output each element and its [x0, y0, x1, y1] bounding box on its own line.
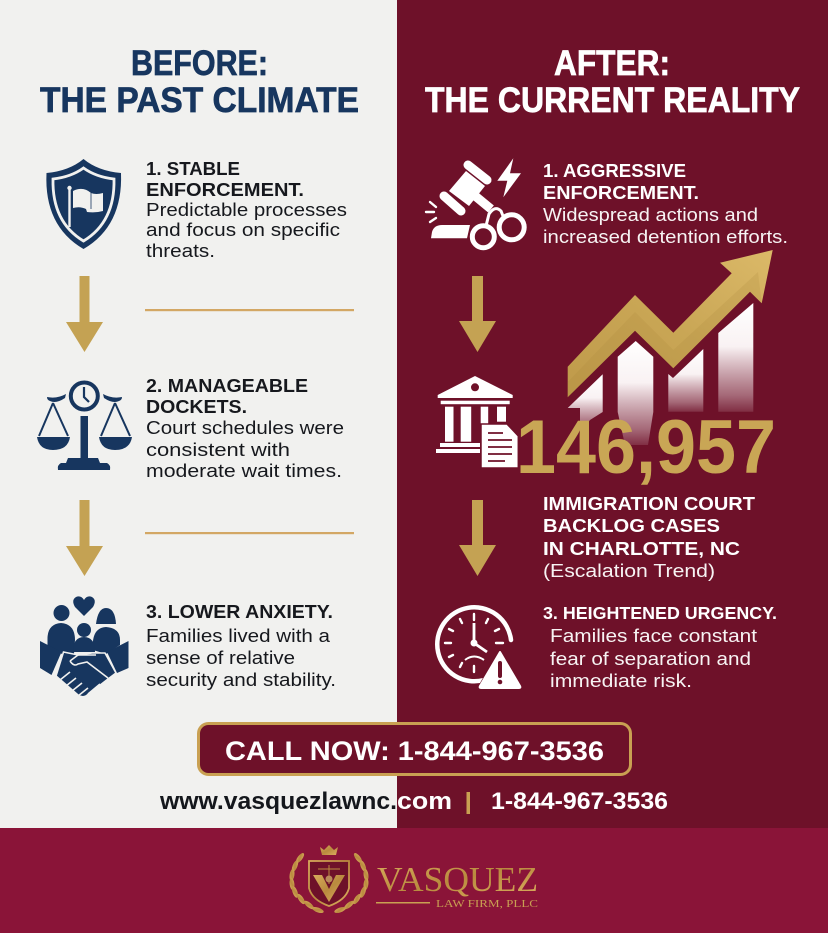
text block: stable enforcement: ENFORCEMENT.	[146, 179, 304, 200]
text block: lower anxiety: security and stability.	[146, 669, 336, 690]
chart: escalation bars and rising arrow	[568, 250, 773, 445]
text block: aggressive enforcement: 1. AGGRESSIVE	[543, 160, 686, 181]
text block: lower anxiety: 3. LOWER ANXIETY.	[146, 601, 333, 622]
text block: backlog cases	[543, 493, 756, 581]
icon: shield with flag	[46, 159, 121, 249]
text block: manageable dockets: moderate wait times.	[146, 460, 342, 481]
text block: lower anxiety: sense of relative	[146, 647, 295, 668]
text block: backlog cases: IN CHARLOTTE, NC	[543, 538, 740, 559]
icon: scales with clock	[37, 382, 132, 470]
panel: after	[397, 0, 828, 828]
contact line	[159, 788, 668, 815]
contact line: 1-844-967-3536	[491, 788, 668, 815]
call to action button: CALL NOW: 1-844-967-3536	[225, 736, 604, 766]
arrow: before step 2 to 3	[66, 500, 103, 576]
text block: stable enforcement: threats.	[146, 240, 215, 261]
text block: heightened urgency: 3. HEIGHTENED URGENCY.	[543, 603, 777, 623]
contact line: com	[397, 788, 452, 815]
arrow: after step 2 to 3	[459, 500, 496, 576]
text block: backlog cases: (Escalation Trend)	[543, 560, 715, 581]
logo wordmark: LAW FIRM, PLLC	[436, 899, 538, 910]
arrow: before step 1 to 2	[66, 276, 103, 352]
heading: after	[425, 44, 800, 120]
stat: backlog number: 146,957	[516, 405, 776, 490]
text block: heightened urgency: immediate risk.	[550, 670, 692, 691]
text block: heightened urgency: fear of separation and	[550, 648, 751, 669]
text block: stable enforcement: and focus on specific	[146, 219, 340, 240]
text block: stable enforcement: Predictable processes	[146, 199, 347, 220]
text block: lower anxiety: Families lived with a	[146, 625, 331, 646]
text block: manageable dockets: DOCKETS.	[146, 396, 247, 417]
text block: aggressive enforcement: ENFORCEMENT.	[543, 182, 699, 203]
logo wordmark: VASQUEZ	[377, 860, 538, 899]
text block: manageable dockets: consistent with	[146, 439, 290, 460]
heading: before	[40, 44, 359, 120]
text block: aggressive enforcement: increased detention efforts.	[543, 226, 788, 247]
call to action button	[198, 724, 630, 774]
heading: before: BEFORE:	[131, 44, 268, 83]
text block: stable enforcement: 1. STABLE	[146, 158, 240, 179]
icon: family and handshake	[40, 596, 128, 697]
text block: aggressive enforcement	[543, 160, 788, 247]
text block: stable enforcement	[146, 158, 347, 261]
text block: backlog cases: IMMIGRATION COURT	[543, 493, 756, 514]
heading: after: THE CURRENT REALITY	[425, 81, 800, 120]
text block: manageable dockets: 2. MANAGEABLE	[146, 375, 308, 396]
panel: before	[0, 0, 397, 828]
heading: before: THE PAST CLIMATE	[40, 81, 359, 120]
heading: after: AFTER:	[554, 44, 670, 83]
text block: aggressive enforcement: Widespread actions and	[543, 204, 758, 225]
logo crest	[289, 845, 369, 914]
text block: heightened urgency: Families face constant	[550, 625, 757, 646]
contact line: www.vasquezlawnc.	[159, 788, 397, 815]
text block: backlog cases: BACKLOG CASES	[543, 515, 720, 536]
footer band	[0, 828, 828, 933]
text block: manageable dockets	[146, 375, 344, 481]
text block: heightened urgency	[543, 603, 777, 691]
text block: manageable dockets: Court schedules were	[146, 417, 344, 438]
icon: gavel, lightning and handcuffs	[426, 158, 524, 248]
logo: Vasquez Law Firm	[289, 845, 538, 914]
icon: clock with warning triangle	[437, 607, 524, 690]
icon: courthouse with document	[436, 376, 518, 468]
text block: lower anxiety	[146, 601, 336, 690]
arrow: after step 1 to 2	[459, 276, 496, 352]
